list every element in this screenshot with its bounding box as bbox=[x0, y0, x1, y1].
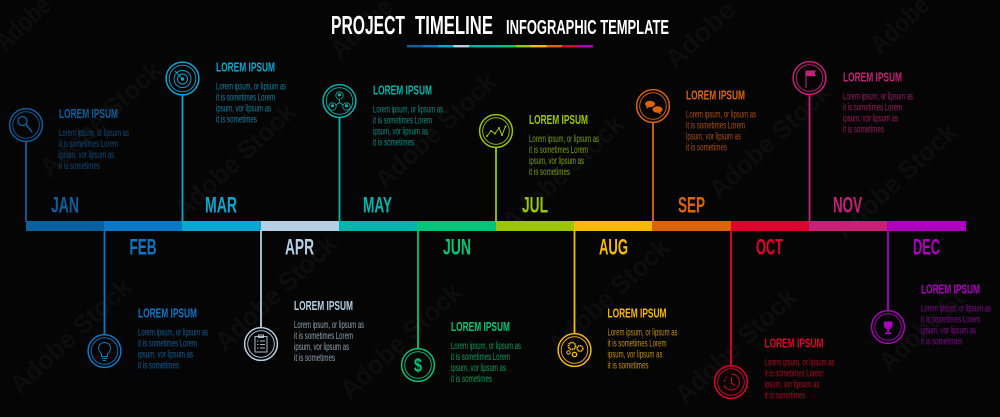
timeline bar bbox=[26, 221, 966, 231]
text block: October: ipsum, vor lipsum as bbox=[764, 379, 820, 391]
month label: JUN: JUN bbox=[443, 234, 471, 260]
icon: clock bbox=[724, 374, 739, 390]
text block: March: it is sometimes bbox=[216, 114, 257, 126]
text block: June: Lorem ipsum, or lipsum as bbox=[451, 340, 521, 352]
title bbox=[331, 10, 669, 40]
text block: February: LOREM IPSUM bbox=[138, 305, 197, 320]
milestone: July bbox=[480, 112, 599, 222]
text block: August: it is sometimes Lorem bbox=[608, 337, 667, 349]
text block: May: Lorem ipsum, or lipsum as bbox=[373, 103, 443, 115]
milestone: March bbox=[166, 60, 286, 222]
text block: January bbox=[59, 106, 129, 172]
icon: magnifier bbox=[18, 116, 32, 132]
text block: April: ipsum, vor lipsum as bbox=[294, 341, 349, 353]
text block: January: Lorem ipsum, or lipsum as bbox=[59, 127, 129, 139]
text block: September: LOREM IPSUM bbox=[686, 87, 745, 102]
icon: speech bubbles bbox=[645, 101, 662, 114]
text: Adobe Stock bbox=[829, 116, 963, 244]
text block: August: ipsum, vor lipsum as bbox=[608, 348, 662, 360]
text block: March: it is sometimes Lorem bbox=[216, 92, 275, 104]
text block: May: it is sometimes Lorem bbox=[373, 114, 432, 126]
text block: September: it is sometimes Lorem bbox=[686, 119, 745, 131]
text block: June bbox=[451, 319, 521, 385]
text block: July: it is sometimes bbox=[529, 166, 570, 178]
milestone: August bbox=[558, 230, 678, 371]
milestone: April bbox=[245, 230, 364, 364]
text block: February: ipsum, vor lipsum as bbox=[138, 348, 193, 360]
text: Adobe Stock bbox=[168, 96, 302, 224]
text block: April: it is sometimes Lorem bbox=[294, 330, 353, 342]
text block: November: Lorem ipsum, or lipsum as bbox=[843, 90, 913, 102]
text block: September: ipsum, vor lipsum as bbox=[686, 130, 741, 142]
text block: May: LOREM IPSUM bbox=[373, 82, 432, 97]
text block: January: LOREM IPSUM bbox=[59, 106, 118, 121]
text block: May: it is sometimes bbox=[373, 136, 414, 148]
text block: July bbox=[529, 112, 599, 178]
text block: February: it is sometimes Lorem bbox=[138, 337, 197, 349]
text: Adobe Stock bbox=[703, 76, 837, 204]
text block: March bbox=[216, 60, 286, 126]
text block: June: ipsum, vor lipsum as bbox=[451, 362, 506, 374]
text block: August: it is sometimes bbox=[608, 359, 648, 371]
title: TIMELINE bbox=[415, 10, 493, 40]
text block: July: LOREM IPSUM bbox=[529, 112, 588, 127]
text block: March: LOREM IPSUM bbox=[216, 60, 275, 74]
text block: February: it is sometimes bbox=[138, 359, 179, 371]
text: Adobe Stock bbox=[669, 281, 803, 409]
text block: September bbox=[686, 87, 756, 153]
text block: September: Lorem ipsum, or lipsum as bbox=[686, 108, 756, 120]
text block: November: LOREM IPSUM bbox=[843, 69, 902, 84]
text block: April: Lorem ipsum, or lipsum as bbox=[294, 319, 364, 331]
milestone: September bbox=[637, 87, 756, 222]
text block: January: ipsum, vor lipsum as bbox=[59, 149, 114, 161]
text block: June: LOREM IPSUM bbox=[451, 319, 510, 334]
text block: October: it is sometimes bbox=[764, 390, 806, 402]
text: Adobe Stock bbox=[369, 66, 503, 194]
text block: December bbox=[921, 281, 991, 347]
text: Adobe Stock bbox=[334, 276, 468, 404]
text: Adobe Stock bbox=[542, 231, 676, 359]
text block: July: it is sometimes Lorem bbox=[529, 144, 588, 156]
month label: FEB: FEB bbox=[130, 234, 156, 260]
text block: November bbox=[843, 69, 913, 135]
milestone: January bbox=[10, 106, 129, 222]
milestone: October bbox=[715, 230, 834, 402]
icon: target bbox=[174, 70, 191, 88]
text block: April: LOREM IPSUM bbox=[294, 298, 353, 313]
milestone: November bbox=[793, 62, 913, 222]
icon: three people network bbox=[329, 92, 350, 110]
milestone: June bbox=[402, 230, 521, 385]
title rainbow underline bbox=[407, 45, 593, 47]
month label: APR: APR bbox=[285, 234, 314, 260]
text block: February: Lorem ipsum, or lipsum as bbox=[138, 326, 208, 338]
text block: April: it is sometimes bbox=[294, 352, 335, 364]
icon: dollar sign: $ bbox=[414, 356, 422, 376]
text block: June: it is sometimes Lorem bbox=[451, 351, 510, 363]
text block: March: Lorem ipsum, or lipsum as bbox=[216, 80, 286, 92]
icon: line chart bbox=[486, 126, 506, 137]
month label: NOV: NOV bbox=[833, 192, 862, 218]
text: Adobe Stock bbox=[209, 228, 343, 356]
milestone: February bbox=[88, 230, 208, 371]
icon: light bulb bbox=[99, 342, 110, 360]
month label: MAR: MAR bbox=[205, 192, 237, 218]
month label: JAN: JAN bbox=[51, 192, 79, 218]
text: Adobe St bbox=[873, 283, 970, 376]
text block: October: LOREM IPSUM bbox=[764, 336, 824, 351]
text block: May: ipsum, vor lipsum as bbox=[373, 125, 428, 137]
month label: OCT: OCT bbox=[756, 234, 783, 260]
text block: November: it is sometimes Lorem bbox=[843, 101, 902, 113]
icon: gears bbox=[567, 342, 583, 357]
text: Adobe Stock bbox=[34, 54, 168, 182]
text block: November: ipsum, vor lipsum as bbox=[843, 112, 898, 124]
text block: October: it is sometimes Lorem bbox=[764, 368, 824, 380]
icon: flag bbox=[806, 70, 816, 88]
text block: June: it is sometimes bbox=[451, 373, 492, 385]
month label: MAY: MAY bbox=[363, 192, 392, 218]
text block: October bbox=[764, 336, 834, 402]
text block: February bbox=[138, 305, 208, 371]
text block: April bbox=[294, 298, 364, 364]
text block: November: it is sometimes bbox=[843, 123, 884, 135]
title: PROJECT bbox=[331, 10, 405, 40]
text block: July: ipsum, vor lipsum as bbox=[529, 155, 584, 167]
text block: May bbox=[373, 82, 443, 148]
icon: clipboard checklist bbox=[255, 335, 267, 352]
text block: July: Lorem ipsum, or lipsum as bbox=[529, 133, 599, 145]
text block: September: it is sometimes bbox=[686, 141, 727, 153]
title: INFOGRAPHIC TEMPLATE bbox=[506, 16, 669, 39]
milestone: May bbox=[323, 82, 443, 222]
month label: AUG: AUG bbox=[599, 234, 628, 260]
text block: August bbox=[608, 305, 678, 371]
text block: December: it is sometimes bbox=[921, 335, 962, 347]
month label: DEC: DEC bbox=[913, 234, 940, 260]
text: Adobe Stock bbox=[496, 108, 630, 236]
text block: March: ipsum, vor lipsum as bbox=[216, 102, 271, 114]
text block: January: it is sometimes bbox=[59, 160, 100, 172]
text block: August: Lorem ipsum, or lipsum as bbox=[608, 326, 678, 338]
month label: SEP: SEP bbox=[678, 192, 705, 218]
text block: October: Lorem ipsum, or lipsum as bbox=[764, 357, 834, 369]
text block: January: it is sometimes Lorem bbox=[59, 138, 118, 150]
text block: August: LOREM IPSUM bbox=[608, 305, 666, 320]
month label: JUL: JUL bbox=[522, 192, 548, 218]
text: Adobe Stock bbox=[4, 271, 138, 399]
milestone: December bbox=[872, 230, 991, 347]
icon: trophy bbox=[884, 322, 892, 334]
